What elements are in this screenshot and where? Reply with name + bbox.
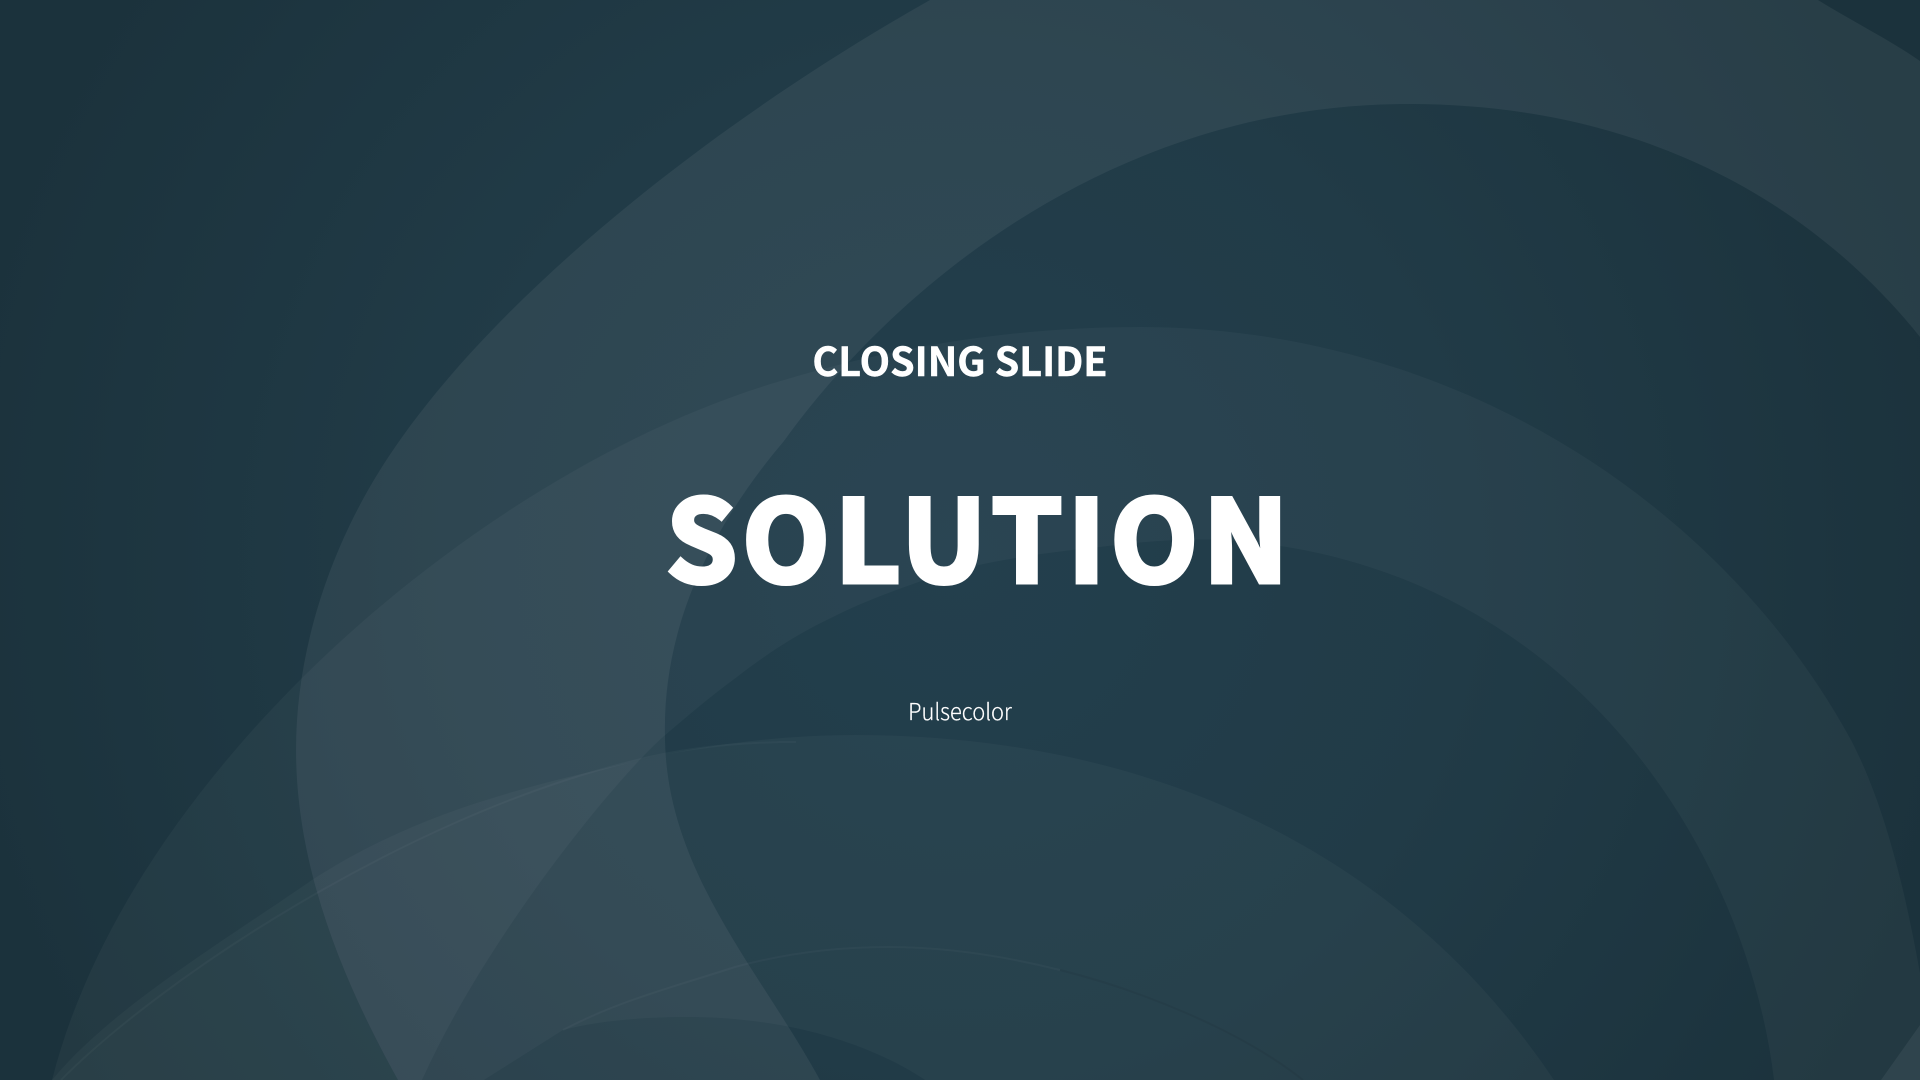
lower arc band [52,735,1554,1080]
thin sweep line left [61,742,796,1080]
author: pulsecolor: Pulsecolor [908,693,1012,727]
thin dark line [1060,970,1303,1080]
corner highlight [1881,1025,1920,1080]
thin sweep line lower [563,947,1060,1030]
subtitle: closing slide: CLOSING SLIDE [812,331,1108,388]
large arch band [52,327,1920,1080]
title: solution: SOLUTION [666,451,1294,615]
